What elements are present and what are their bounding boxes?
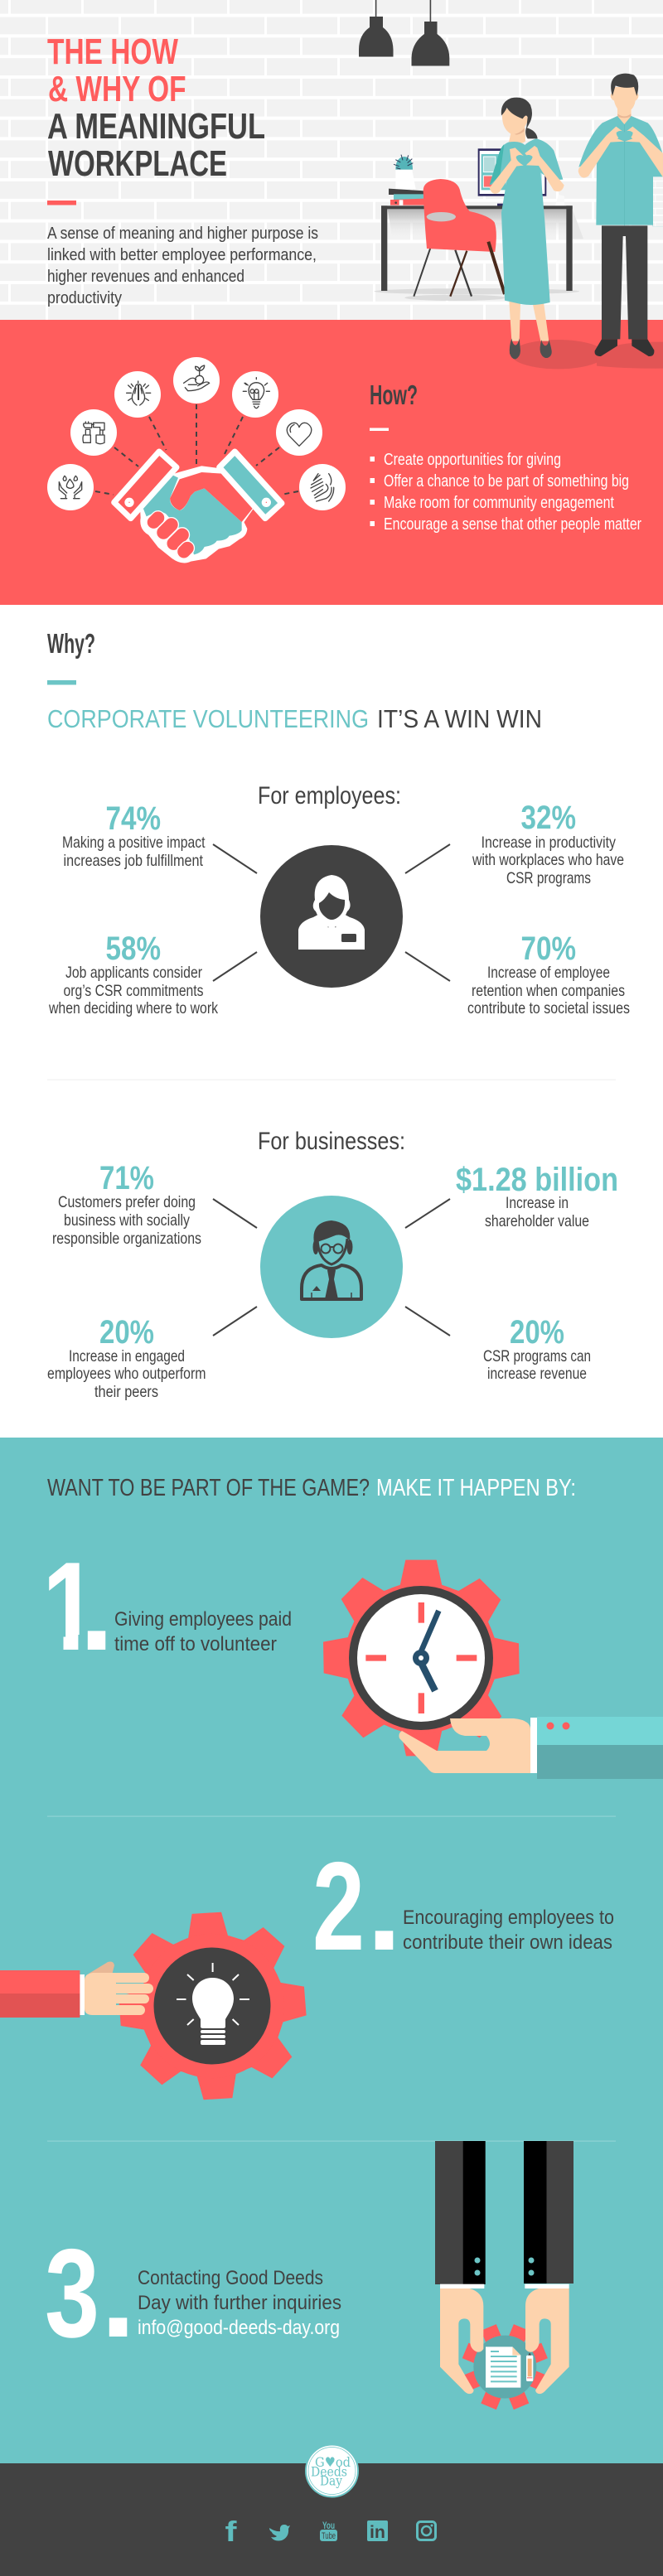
- divider: [47, 2141, 616, 2142]
- step 2: [0, 1836, 614, 2105]
- logo: Good Deeds Day: [306, 2444, 358, 2497]
- stat: 20% revenue: [483, 1314, 591, 1383]
- cactus pot and books: [389, 155, 424, 205]
- stat: 70%: contribute to societal issues: [467, 999, 630, 1017]
- icon: plant in hand: [184, 365, 210, 391]
- stat: 74%: Making a positive impact: [62, 834, 206, 852]
- intro paragraph: higher revenues and enhanced: [47, 267, 244, 286]
- icon: praying hands with rays: [127, 381, 151, 405]
- icon: interlocked hands: [83, 422, 104, 444]
- intro paragraph: [47, 224, 318, 307]
- stat: 58%: when deciding where to work: [48, 999, 218, 1017]
- divider: [47, 1816, 616, 1817]
- section headline: CORPORATE VOLUNTEERING: [47, 704, 369, 733]
- stat: 58%: 58%: [106, 930, 161, 967]
- stat: 20% engaged employees: 20%: [99, 1314, 154, 1351]
- title: [47, 31, 265, 184]
- man: [578, 74, 663, 356]
- icon: lightbulb gear with hand: [0, 1907, 311, 2105]
- monitor: [478, 148, 564, 206]
- stat: 20% revenue: CSR programs can: [483, 1347, 591, 1365]
- step 3 text: [138, 2267, 341, 2339]
- social icons: [225, 2516, 436, 2548]
- title: WORKPLACE: [48, 143, 227, 184]
- desk shadows: [374, 209, 583, 301]
- stat: 74%: [62, 800, 206, 870]
- handshake hub with dashed connectors and icon circles: [47, 357, 346, 563]
- step 1: [38, 1536, 663, 1779]
- stat: 71%: [52, 1160, 201, 1248]
- stat: 71%: Customers prefer doing: [58, 1193, 196, 1211]
- stat: 20% engaged employees: employees who outperform: [47, 1365, 206, 1383]
- title: A MEANINGFUL: [47, 106, 265, 147]
- stat: 32%: [472, 800, 624, 887]
- step 1 text: [114, 1608, 292, 1655]
- stat: 20% engaged employees: Increase in engaged: [69, 1347, 185, 1365]
- panel: brick wall header background: [0, 0, 663, 321]
- stat: $1.28 billion: Increase in: [506, 1194, 569, 1212]
- icon: employee in dark circle: [260, 845, 403, 988]
- icon: clock gear on hand: [323, 1560, 663, 1779]
- big numeral 1: .: [80, 1536, 114, 1677]
- how bullet list: Create opportunities for giving: [384, 451, 561, 469]
- stat: 32%: Increase in productivity: [482, 834, 616, 852]
- stat: 70%: 70%: [520, 930, 576, 967]
- chair: [414, 179, 505, 297]
- intro paragraph: productivity: [47, 288, 123, 307]
- desk: [381, 205, 573, 291]
- title: & WHY OF: [48, 69, 186, 109]
- section heading: MAKE IT HAPPEN BY:: [376, 1475, 576, 1501]
- panel: teal make it happen background: [0, 1438, 663, 2463]
- logo: Good Deeds Day: Day: [320, 2472, 342, 2489]
- connector lines: [213, 1199, 450, 1336]
- icon: linkedin: [367, 2520, 388, 2542]
- dashed connectors: [95, 404, 298, 495]
- icon: hands with droplets: [59, 476, 82, 499]
- step 1 text: Giving employees paid: [114, 1608, 292, 1631]
- stat: 20% revenue: increase revenue: [487, 1365, 587, 1383]
- step 3 text: Contacting Good Deeds: [138, 2267, 323, 2289]
- icon: twitter: [269, 2525, 290, 2540]
- intro paragraph: A sense of meaning and higher purpose is: [47, 224, 318, 243]
- how bullet list: [370, 451, 641, 534]
- icon: facebook: f: [225, 2516, 237, 2548]
- icon: businessman in teal circle: [260, 1196, 403, 1338]
- logo: Good Deeds Day: G♥od: [315, 2454, 351, 2470]
- how heading: How?: [370, 379, 418, 410]
- stat: 70%: [467, 930, 630, 1017]
- big numeral 2: .: [366, 1836, 402, 1977]
- step 2 text: contribute their own ideas: [403, 1931, 612, 1954]
- logo: Good Deeds Day: Deeds: [311, 2464, 347, 2479]
- panel: for businesses: [47, 1128, 618, 1401]
- stat: 32%: 32%: [520, 800, 576, 836]
- floor shadow: [511, 340, 663, 369]
- subheading: For businesses:: [258, 1128, 405, 1155]
- stat: 70%: retention when companies: [472, 982, 625, 1000]
- intro paragraph: linked with better employee performance,: [47, 245, 317, 264]
- stat: 74%: 74%: [106, 800, 161, 837]
- woman: [490, 98, 564, 359]
- big numeral 3: 3: [45, 2223, 99, 2364]
- panel: red how section background: [0, 320, 663, 605]
- stat: 74%: increases job fulfillment: [63, 852, 203, 870]
- step 3: [45, 2141, 573, 2409]
- step 3 text: info@good-deeds-day.org: [138, 2317, 340, 2339]
- stat: 32%: CSR programs: [506, 869, 591, 887]
- big numeral 1: 1: [42, 1536, 98, 1677]
- stat: 58%: Job applicants consider: [65, 964, 202, 982]
- how accent bar: [370, 428, 389, 431]
- why heading: Why?: [47, 628, 95, 659]
- step 2 text: Encouraging employees to: [403, 1907, 614, 1929]
- stat: 71%: 71%: [99, 1160, 154, 1196]
- illustration: office with desk, chair and two people: [374, 74, 663, 369]
- subheading: For employees:: [258, 782, 401, 810]
- stat: $1.28 billion: $1.28 billion: [456, 1162, 618, 1198]
- big numeral 3: .: [101, 2223, 136, 2364]
- section heading: WANT TO BE PART OF THE GAME?: [47, 1475, 370, 1501]
- line icons: [59, 365, 334, 501]
- icon: linkedin: in: [370, 2523, 385, 2542]
- title: THE HOW: [47, 31, 178, 72]
- icon: heart: [287, 423, 312, 446]
- stat: 70%: Increase of employee: [487, 964, 610, 982]
- icon circles backgrounds: [47, 357, 346, 510]
- step 3 text: Day with further inquiries: [138, 2292, 341, 2314]
- stat: 71%: business with socially: [64, 1211, 190, 1230]
- why accent bar: [47, 680, 76, 684]
- panel: dark footer: [0, 2463, 663, 2576]
- big numeral 2: 2: [312, 1836, 365, 1977]
- stat: 71%: responsible organizations: [52, 1230, 201, 1248]
- stat: 58%: [48, 930, 218, 1017]
- connector lines: [213, 844, 450, 981]
- handshake: [114, 452, 282, 563]
- stat: $1.28 billion: [456, 1162, 618, 1230]
- section headline: IT’S A WIN WIN: [377, 704, 542, 733]
- icon: instagram: [418, 2522, 436, 2540]
- stat: 20% revenue: 20%: [510, 1314, 564, 1351]
- icon: youtube: [320, 2520, 337, 2541]
- stat: 32%: with workplaces who have: [472, 851, 624, 869]
- icon: hanging lamps: [359, 0, 449, 66]
- stat: 20% engaged employees: [47, 1314, 206, 1401]
- stat: 20% engaged employees: their peers: [94, 1383, 158, 1401]
- panel: for employees: [48, 782, 630, 1017]
- icon: light bulb: [243, 378, 269, 408]
- icon: youtube: Tube: [322, 2531, 336, 2541]
- stat: $1.28 billion: shareholder value: [485, 1212, 589, 1230]
- icon: youtube: You: [322, 2520, 335, 2531]
- icon: hands holding document gear: [435, 2141, 573, 2409]
- title accent bar: [47, 201, 76, 205]
- icon: helping hands: [311, 474, 334, 501]
- step 1 text: time off to volunteer: [114, 1633, 277, 1655]
- divider: [47, 1079, 616, 1080]
- step 2 text: [403, 1907, 614, 1954]
- stat: 58%: org’s CSR commitments: [63, 982, 204, 1000]
